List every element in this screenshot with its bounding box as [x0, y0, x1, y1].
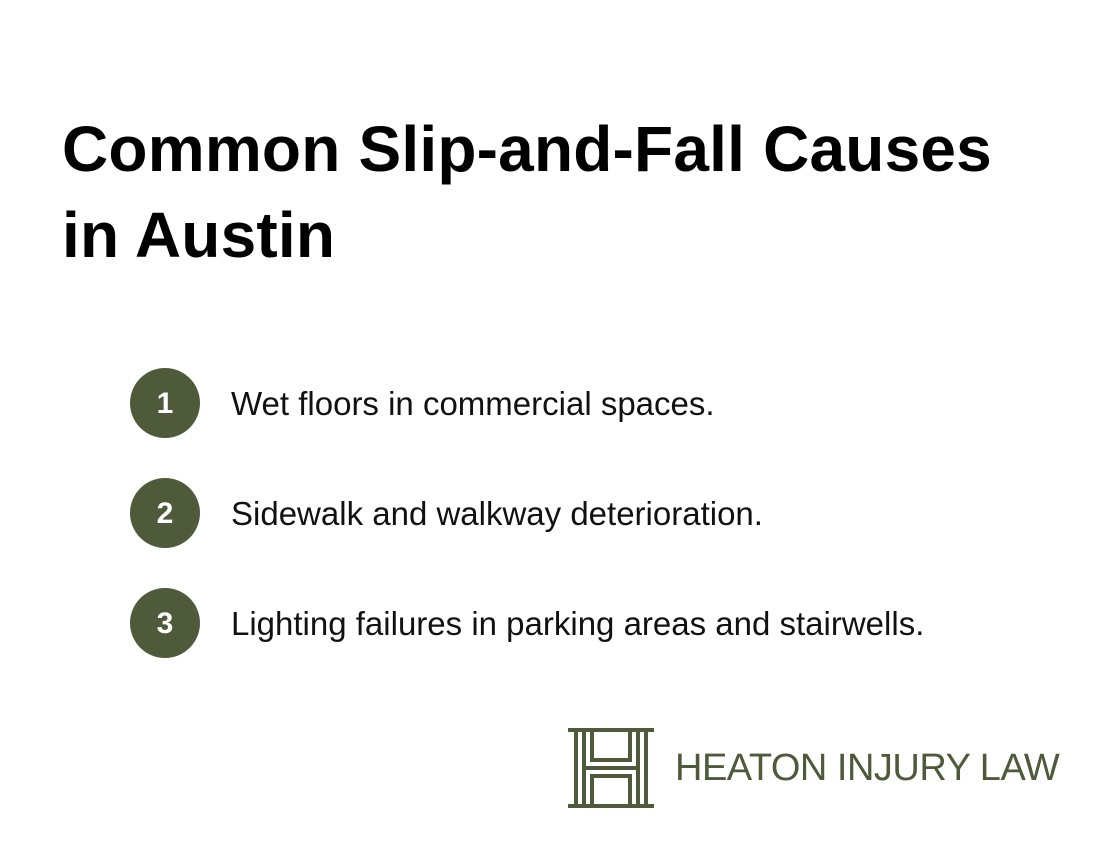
number badge 1 — [130, 368, 200, 438]
logo wordmark: HEATON INJURY LAW — [675, 747, 1059, 789]
number badge 3 — [130, 588, 200, 658]
title: Common Slip-and-Fall Causes — [62, 113, 992, 185]
number badge 1: 1 — [157, 387, 173, 420]
list item 3 — [130, 588, 924, 658]
number badge 2 — [130, 478, 200, 548]
icon: H monogram — [568, 728, 654, 808]
logo — [568, 728, 1060, 808]
number badge 2: 2 — [157, 497, 173, 530]
item text 1: Wet floors in commercial spaces. — [231, 385, 715, 422]
list item 2 — [130, 478, 763, 548]
item text 2: Sidewalk and walkway deterioration. — [231, 495, 763, 532]
title — [62, 113, 992, 271]
number badge 3: 3 — [157, 607, 173, 640]
list item 1 — [130, 368, 715, 438]
title: in Austin — [62, 199, 335, 271]
item text 3: Lighting failures in parking areas and stairwells. — [231, 605, 924, 642]
